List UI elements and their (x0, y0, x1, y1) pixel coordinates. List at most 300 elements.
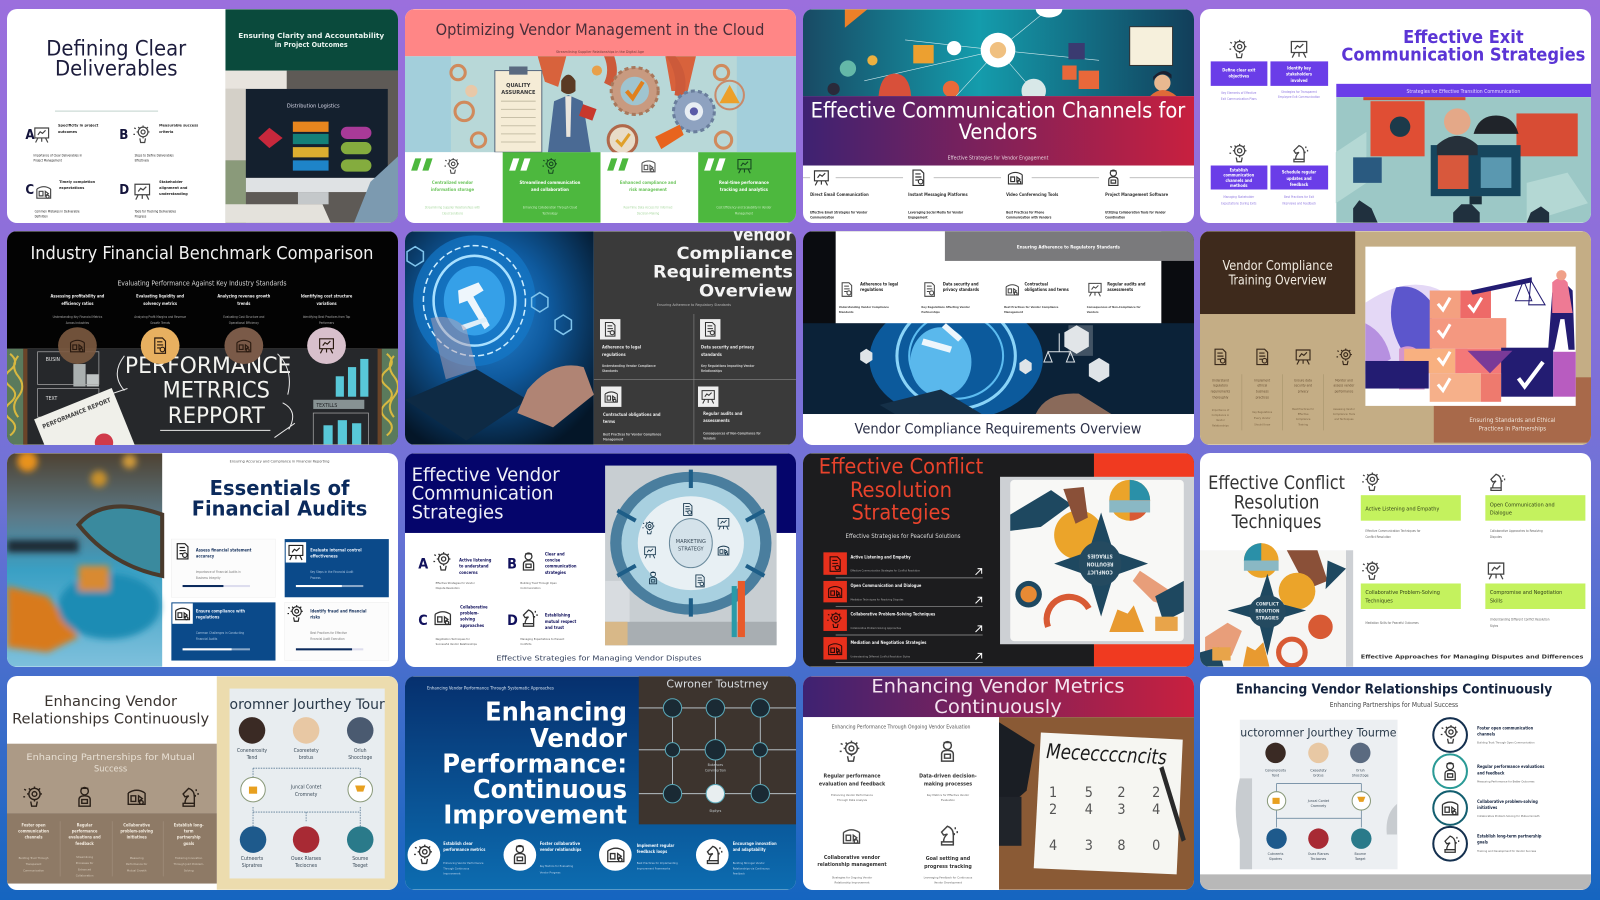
dark title block: Training Overview (1228, 273, 1327, 288)
white panel with items: Contractual (1025, 281, 1048, 286)
audit cards (171, 539, 389, 661)
audit cards: accuracy (196, 553, 215, 558)
deliverables list: alignment and (159, 185, 188, 190)
panel: Effective Conflict Resolution Techniques slide (1200, 453, 1591, 667)
gradient title band: Continuously (934, 697, 1062, 718)
improvement steps: Encourage innovation (733, 840, 777, 845)
audit cards: Key Steps in the Financial Audit (310, 570, 354, 574)
panel: Effective Vendor Communication slide (405, 453, 796, 667)
brown columns: Through Joint Problem- (174, 862, 204, 866)
deliverables list: Effectively (135, 158, 149, 162)
improvement steps: Implement regular (637, 842, 675, 847)
conflict illustration (1200, 543, 1353, 667)
customer journey image: Cutneerts (1268, 851, 1284, 855)
metrics grid: progress tracking (924, 864, 972, 870)
title: Vendor (530, 723, 628, 753)
deliverables list: A (25, 128, 35, 143)
training columns: and Techniques (1334, 417, 1354, 421)
brown columns: evaluations and (69, 834, 101, 839)
black header: Performers (319, 321, 335, 325)
navy header: Communication (412, 483, 554, 504)
dark content panel: regulations (602, 352, 626, 357)
panel: Optimizing Vendor Management slide (405, 9, 796, 223)
metrics grid: Leveraging Feedback for Continuous (924, 875, 973, 879)
training columns: Key Regulations (1252, 410, 1273, 414)
title: Enhancing (485, 697, 627, 727)
customer journey image: Juncal Contet (1307, 798, 1330, 802)
strategy list: Active listening (459, 558, 492, 563)
conflict illustration: REOUTION (1255, 609, 1280, 615)
brown columns: Streamlining (76, 855, 93, 859)
technique grid: Dialogue (1490, 511, 1512, 517)
four feature columns: Enhancing Collaboration Through Cloud (523, 205, 577, 209)
notepad photo: 3 (1085, 837, 1093, 853)
digital scales image (803, 231, 1194, 420)
white panel with items: Consequences of Non-Compliance for (1087, 305, 1141, 309)
partnership list: Measuring Performance for Better Outcomes (1477, 779, 1535, 783)
strategy rows: Open Communication and Dialogue (850, 583, 922, 588)
objectives grid: Best Practices for Exit (1284, 195, 1315, 199)
title: Deliverables (55, 57, 177, 82)
training columns: thoroughly (1213, 396, 1229, 400)
brown columns: Fostering Innovation (175, 856, 203, 860)
office photo with monitor: Distribution Logistics (287, 103, 340, 109)
brown columns: Regular (77, 822, 93, 827)
footer title (803, 414, 1194, 445)
partnership list: Collaborative Problem Solving for Mutual Growth (1477, 814, 1540, 818)
marketing wheel image (605, 466, 777, 645)
training columns: Compliance (1296, 417, 1311, 421)
objectives grid: Interviews and Feedback (1282, 201, 1316, 205)
panel: Vendor Compliance Requirements light slide (803, 231, 1194, 445)
brown columns: Processes for (76, 861, 94, 865)
customer journey image: Sipratres (242, 863, 263, 869)
four feature columns: Real-Time Data Access for Informed (624, 205, 673, 209)
black header: Identifying Best Practices from Top (303, 315, 351, 319)
dark content panel: Best Practices for Vendor Compliance (603, 432, 661, 436)
white panel with items: Management (1004, 310, 1024, 314)
brown caption block: Ensuring Standards and Ethical (1469, 417, 1556, 424)
black header: Operational Efficiency (229, 321, 259, 325)
audit cards: Process (310, 576, 321, 580)
customer journey image: Teciocnes (294, 863, 318, 869)
partnership list: Collaborative problem-solving (1477, 798, 1538, 803)
deliverables list: criteria (159, 129, 174, 134)
dark content panel (594, 225, 796, 445)
dark content panel: Management (603, 438, 624, 442)
deliverables list (25, 123, 198, 219)
strategy list: Effective Strategies for Vendor (436, 581, 476, 585)
black header: Analyzing Profit Margins and Revenue (134, 315, 186, 319)
brown columns: initiatives (127, 834, 147, 839)
black header: Evaluating Cost Structure and (223, 315, 265, 319)
dark content panel: Vendors (703, 437, 716, 441)
panel: Enhancing Vendor Relationships taupe slide (7, 676, 398, 890)
dark content panel: Standards (602, 369, 618, 373)
deliverables list: Steps to Define Deliverables (135, 153, 174, 157)
title (1341, 28, 1585, 65)
white panel with items: Understanding Vendor Compliance (839, 305, 889, 309)
black header: variations (316, 301, 337, 306)
title (1208, 473, 1345, 533)
audit cards: Financial Audit Execution (310, 637, 345, 641)
white panel with items: Adherence to legal (860, 281, 898, 286)
brown columns: performance (72, 828, 98, 833)
customer journey image: Soume (352, 856, 368, 862)
deliverables list: D (119, 183, 129, 198)
chalkboard: TEXTILLS (315, 403, 337, 409)
technique grid: Collaborative Problem-Solving (1365, 590, 1440, 596)
strategy list: D (507, 613, 518, 629)
white panel with items: Standards (839, 310, 854, 314)
audit cards: Common Challenges in Conducting (196, 631, 244, 635)
strategy list: Building Trust Through Open (520, 581, 557, 585)
customer journey image: Shocctoge (348, 755, 372, 761)
white panel with items: Partnerships (921, 310, 940, 314)
strategy list: mutual respect (545, 619, 576, 624)
channel row: Coordination (1105, 216, 1125, 220)
gradient title band: Effective Strategies for Vendor Engagement (948, 155, 1049, 161)
strategy list: problem- (460, 611, 479, 616)
training columns: Monitor and (1335, 378, 1353, 382)
brown columns: partnership (177, 834, 201, 839)
office photo with monitor (225, 71, 398, 223)
training columns: regulatory (1213, 383, 1228, 387)
white panel with items: privacy standards (943, 287, 979, 292)
black header: Industry Financial Benchmark Comparison (30, 244, 373, 264)
black header: trends (237, 301, 250, 306)
white panel with items: assessments (1107, 287, 1133, 292)
audit cards: Identify fraud and financial (310, 609, 367, 614)
training columns: Effective (1298, 412, 1309, 416)
strategy list: B (507, 557, 517, 573)
metrics grid: Collaborative vendor (824, 855, 881, 861)
training columns: Training (1298, 422, 1308, 426)
dark content panel: Data security and privacy (701, 345, 755, 350)
improvement steps: Key Metrics for Evaluating (540, 864, 574, 868)
deliverables list: C (25, 183, 34, 198)
training columns (1211, 348, 1356, 430)
technique grid: Active Listening and Empathy (1365, 506, 1439, 512)
black header: Across Industries (66, 321, 90, 325)
title: Improvement (443, 800, 627, 830)
title: Resolution (850, 478, 952, 503)
dark content panel: standards (701, 352, 723, 357)
strategy list: concise (545, 558, 561, 563)
deliverables list: Measurable success (159, 123, 198, 128)
title (46, 36, 186, 82)
four feature columns: and collaboration (531, 187, 569, 193)
strategy list: C (418, 613, 428, 629)
technique grid: Conflict Resolution (1365, 535, 1391, 539)
brown columns: Enhanced (78, 867, 91, 871)
notepad photo: 2 (1049, 802, 1057, 818)
channel row: Direct Email Communication (810, 192, 869, 197)
customer journey image: Orluh (354, 747, 367, 753)
technique grid: Effective Communication Techniques for (1365, 529, 1421, 533)
white panel with items: Regular audits and (1107, 281, 1146, 286)
objectives grid: feedback (1290, 182, 1309, 187)
journey board image: Stpllyrs (709, 809, 722, 813)
objectives grid: objectives (1229, 74, 1249, 79)
customer journey image: brotus (299, 755, 314, 761)
four feature columns: Technology (542, 212, 558, 216)
panel: Enhancing Vendor Performance slide (405, 676, 796, 890)
strategy rows: Understanding Different Conflict Resolution Styles (850, 654, 911, 658)
objectives grid: methods (1230, 183, 1248, 188)
customer journey image: Cromnety (295, 791, 318, 797)
dark content panel: Regular audits and (703, 411, 743, 416)
brown caption block: Practices in Partnerships (1479, 425, 1546, 432)
chalkboard: PERFORMANCE (125, 353, 291, 379)
illustration: quality assurance: QUALITY (506, 83, 531, 89)
improvement steps: and adaptability (733, 846, 766, 851)
notepad photo: 8 (1117, 837, 1126, 853)
metric icons (58, 327, 346, 364)
title (819, 455, 984, 540)
gradient title band (803, 96, 1194, 166)
brown columns: Collaborative (123, 822, 151, 827)
training columns: Understand (1212, 378, 1229, 382)
title: Ensuring Accuracy and Compliance in Financial Reporting (230, 459, 329, 464)
strategy rows: Mediation and Negotiation Strategies (850, 640, 926, 645)
objectives grid: Key Elements of Effective (1221, 91, 1257, 95)
improvement steps: vendor relationships (540, 846, 581, 851)
dark content panel: assessments (703, 418, 730, 423)
deliverables list: B (119, 128, 128, 143)
chalkboard: PERFORMANCE REPORT (42, 397, 112, 431)
white panel with items: Vendors (1087, 310, 1099, 314)
taupe section: Enhancing Partnerships for Mutual (26, 752, 195, 763)
channel row: Project Management Software (1105, 192, 1169, 197)
four feature columns: Real-time performance (719, 180, 769, 186)
customer journey image: Ouex Rlarses (1308, 851, 1329, 855)
customer journey image: Cutneerts (241, 856, 264, 862)
black header: Analyzing revenue growth (217, 294, 271, 299)
audit cards: effectiveness (310, 553, 339, 558)
technique grid: Effective Approaches for Managing Disputes and Differences (1361, 655, 1583, 661)
journey board image: Bukances (708, 763, 723, 767)
black header: solvency metrics (143, 301, 177, 306)
training columns: security and (1294, 383, 1312, 387)
chalkboard: BUSIN (46, 357, 60, 363)
four feature columns: risk management (629, 187, 667, 193)
channel row: Video Conferencing Tools (1006, 192, 1059, 197)
technique grid: Understanding Different Conflict Resolution (1490, 618, 1550, 622)
strategy rows: Collaborative Problem-Solving Approaches (850, 626, 902, 630)
panel: Enhancing Vendor Metrics slide (803, 676, 1194, 890)
deliverables list: Stakeholder (159, 179, 183, 184)
digital gavel image (405, 231, 594, 445)
brown columns: term (184, 828, 194, 833)
brown columns: problem-solving (120, 828, 153, 833)
title: Effective Strategies for Peaceful Solutions (846, 533, 961, 540)
customer journey image (1236, 719, 1398, 869)
title: Essentials of (210, 476, 351, 500)
customer journey image: Shocctoge (1352, 773, 1369, 777)
improvement steps: Through Continuous (443, 866, 470, 870)
channel row (803, 170, 1194, 220)
navy header: Strategies (412, 503, 504, 524)
audit cards: Importance of Financial Audits in (196, 570, 241, 574)
metrics grid: Enhancing Performance Through Ongoing Vendor Evaluation (832, 724, 971, 730)
brown columns: feedback (75, 840, 94, 845)
title: Communication Strategies (1341, 45, 1585, 65)
strategy list: Managing Expectations to Prevent (520, 637, 564, 641)
training columns: Every Vendor (1254, 416, 1271, 420)
deliverables list: expectations (59, 185, 84, 190)
title: Strategies (851, 501, 951, 526)
metrics grid: Relationship Improvement (834, 880, 870, 884)
dark content panel: Ensuring Adherence to Regulatory Standards (657, 303, 731, 307)
deliverables list: Specificity in project (58, 123, 99, 128)
customer journey image: Conenerosity (237, 747, 267, 753)
gradient title band (803, 676, 1194, 718)
strategy list: concerns (459, 570, 479, 575)
chalkboard: TEXT (45, 396, 58, 402)
panel: Essentials of Financial Audits slide (7, 453, 398, 667)
audit cards: regulations (196, 615, 220, 620)
purple band: Strategies for Effective Transition Communication (1407, 89, 1520, 95)
network illustration (803, 1, 1194, 103)
panel: Industry Financial Benchmark slide (7, 231, 398, 445)
training columns: ethical (1257, 383, 1267, 387)
customer journey image: Cxoeetety (1310, 768, 1327, 772)
green header: Ensuring Clarity and Accountability (238, 31, 385, 40)
four feature columns: Centralized vendor (432, 180, 473, 186)
objectives grid: Managing Stakeholder (1223, 195, 1255, 199)
dark content panel: Compliance (677, 243, 793, 263)
conflict illustration: STRAGIES (1256, 616, 1279, 622)
partnership list: Training and Development for Vendor Success (1477, 848, 1537, 852)
metrics grid: Data-driven decision- (919, 773, 977, 779)
dark content panel: Relationships (701, 369, 722, 373)
conflict illustration: CONFLICT (1256, 601, 1279, 607)
training columns: Vendor (1216, 418, 1226, 422)
customer journey image: Orluh (1356, 768, 1365, 772)
partnership list: Regular performance evaluations (1477, 764, 1544, 769)
objectives grid: updates and (1286, 176, 1312, 181)
training columns: Best Practices for (1292, 407, 1315, 411)
partnership list: Establish long-term partnership (1477, 833, 1542, 838)
partnership list: goals (1477, 839, 1488, 844)
metrics grid: evaluation and feedback (819, 781, 886, 787)
coral header: Optimizing Vendor Management in the Cloud (436, 20, 764, 39)
black header: Growth Trends (150, 321, 171, 325)
strategy list: Conflicts (520, 642, 532, 646)
strategy rows (823, 552, 983, 663)
brown columns: Transparent (26, 862, 41, 866)
audit cards: Ensure compliance with (196, 609, 245, 614)
notepad photo: 2 (1152, 784, 1160, 800)
channel row: Effective Email Strategies for Vendor (810, 210, 868, 214)
training columns: privacy (1298, 390, 1309, 394)
improvement steps: Foster collaborative (540, 840, 581, 845)
chalkboard: REPPORT (168, 403, 265, 429)
title (12, 693, 210, 727)
panel: Effective Conflict Resolution Strategies slide (803, 453, 1194, 667)
strategy list: solving (460, 617, 475, 622)
customer journey image: Bourne (1355, 851, 1366, 855)
navy header (405, 453, 796, 533)
partnership list: Foster open communication (1477, 725, 1534, 730)
strategy list: Communication (520, 586, 541, 590)
improvement steps: performance metrics (443, 846, 485, 851)
black header: Evaluating liquidity and (136, 294, 185, 299)
strategy list: Collaborative (460, 604, 488, 609)
technique grid: Disputes (1490, 535, 1502, 539)
channel row: Engagement (908, 216, 928, 220)
improvement steps: Feedback (733, 871, 745, 875)
four feature columns: information storage (431, 187, 475, 193)
training columns: requirements (1211, 390, 1231, 394)
deliverables list: outcomes (58, 129, 77, 134)
navy header: Effective Vendor (412, 465, 560, 486)
partnership list: Building Trust Through Open Communication (1477, 740, 1535, 744)
strategy list (418, 551, 577, 646)
partnership list: and feedback (1477, 770, 1505, 775)
subtitle: Enhancing Vendor Performance Through Systematic Approaches (427, 685, 554, 691)
title (442, 697, 628, 830)
customer journey image (230, 688, 385, 878)
purple band (1336, 84, 1591, 97)
strategy list: strategies (545, 570, 567, 575)
brown columns: Building Trust Through (19, 856, 49, 860)
strategy list: A (418, 557, 428, 573)
notepad photo: Mececcccncits (1046, 739, 1168, 769)
deliverables list: understanding (159, 191, 188, 196)
technique grid: Techniques (1364, 598, 1393, 604)
brown columns: channels (25, 834, 43, 839)
dark content panel: Key Regulations Impacting Vendor (701, 364, 755, 368)
title: Effective Exit (1403, 28, 1524, 48)
notepad photo: 2 (1117, 784, 1126, 800)
dark content panel: Overview (699, 281, 793, 301)
metrics grid (803, 717, 999, 889)
conflict illustration: REOUTION (1086, 561, 1114, 567)
chalkboard (5, 349, 398, 476)
conflict illustration (1000, 477, 1194, 644)
dark content panel: Requirements (653, 261, 793, 281)
deliverables list: Timely completion (59, 179, 96, 184)
four feature columns: Cloud Solutions (442, 212, 464, 216)
customer journey image: brotus (1313, 773, 1324, 777)
customer journey image: Juncal Contet (290, 784, 322, 790)
technique grid: Styles (1490, 624, 1499, 628)
customer journey image: Ouex Rlarses (291, 856, 322, 862)
channel row: Communication with Vendors (1006, 216, 1052, 220)
brown columns: Measuring (130, 856, 144, 860)
black header: Evaluating Performance Against Key Industry Standards (117, 279, 287, 287)
gradient title band: Effective Communication Channels for (811, 99, 1185, 124)
metrics grid: Vendor Development (934, 880, 962, 884)
strategy rows: Collaborative Problem-Solving Techniques (850, 612, 935, 617)
metrics grid: Key Metrics for Effective Vendor (927, 792, 970, 796)
training columns: Implement (1254, 378, 1271, 382)
panel: Vendor Compliance Training slide (1200, 231, 1591, 445)
customer journey image: uctoromner Jourthey Tourme (1240, 726, 1397, 739)
customer journey image: Cromnety (1311, 803, 1326, 807)
objectives grid: Schedule regular (1282, 170, 1316, 175)
brown columns: Performance for (126, 862, 148, 866)
title: Effective Conflict (819, 455, 984, 480)
strategy rows: Active Listening and Empathy (850, 554, 911, 559)
compliance illustration (1365, 247, 1576, 406)
illustration: quality assurance: ASSURANCE (501, 90, 536, 96)
improvement steps (408, 839, 777, 875)
brown columns: Communication (23, 868, 44, 872)
notepad photo (999, 717, 1194, 889)
